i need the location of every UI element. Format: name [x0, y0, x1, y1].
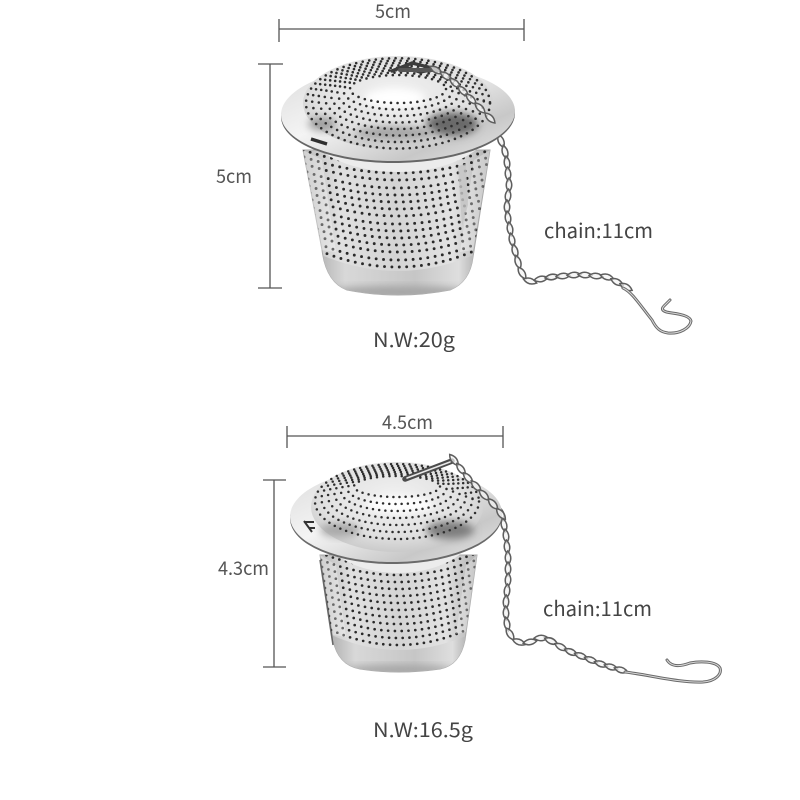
basket body	[320, 555, 477, 672]
lid perforations	[315, 464, 479, 539]
dimension: top infuser width 5cm	[279, 0, 524, 42]
label: net weight 16.5g: N.W:16.5g	[373, 714, 473, 743]
infuser: large tea ball	[280, 56, 691, 333]
lid dome	[311, 462, 483, 552]
basket perforations	[320, 553, 477, 645]
chain and hook	[501, 514, 720, 682]
dimension: top infuser height 5cm: 5cm	[216, 162, 252, 189]
label: chain length, bottom: chain:11cm	[543, 593, 652, 622]
dimension: bottom infuser height 4.3cm: 4.3cm	[218, 554, 269, 581]
dimension: bottom infuser width 4.5cm	[287, 408, 503, 448]
lid dome	[303, 56, 493, 150]
lid latch and upper chain	[405, 460, 501, 514]
collar under rim	[319, 475, 477, 573]
basket perforations	[303, 150, 490, 267]
reflections on basket	[320, 555, 346, 637]
solid bottom band	[332, 636, 466, 672]
rim	[289, 468, 503, 566]
solid bottom band	[323, 256, 473, 295]
dimension: bottom infuser height 4.3cm	[218, 480, 286, 667]
lid latch and upper chain	[392, 63, 490, 118]
rim slot	[311, 139, 327, 144]
basket body	[303, 150, 490, 295]
label: chain length, top: chain:11cm	[544, 215, 653, 244]
rim logo mark	[304, 521, 315, 532]
infuser: small tea ball	[289, 460, 720, 682]
label: net weight 20g: N.W:20g	[373, 324, 455, 353]
reflections on basket	[303, 150, 336, 252]
dimension: bottom infuser width 4.5cm: 4.5cm	[382, 408, 433, 435]
dimension: top infuser height 5cm	[216, 64, 283, 288]
chain and hook	[490, 118, 691, 333]
rim	[280, 65, 516, 165]
lid perforations	[306, 58, 490, 148]
collar under rim	[304, 72, 492, 172]
